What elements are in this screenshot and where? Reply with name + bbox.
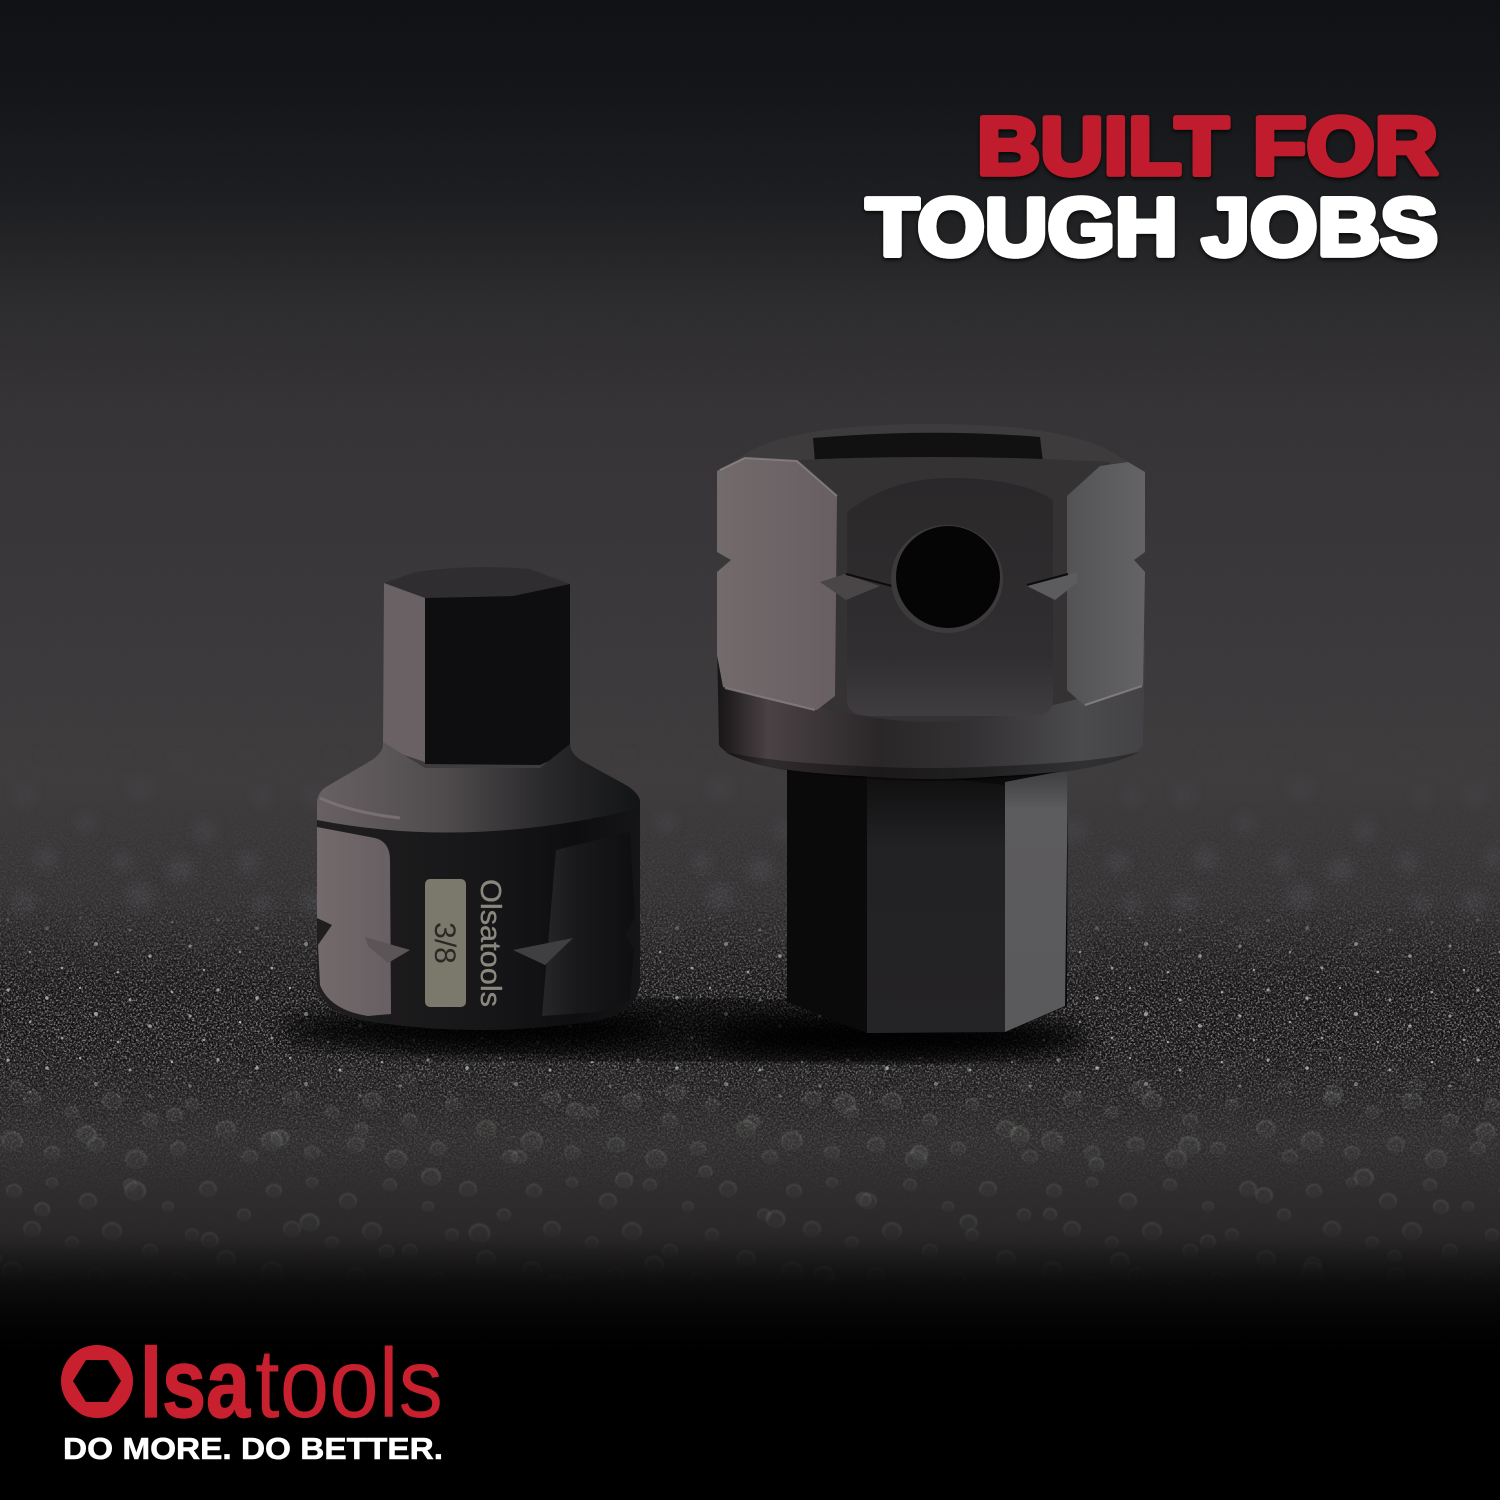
sparkling glints on the surface [6,916,1500,1098]
shadow under sockets [280,1004,1090,1060]
large socket: band lower shadow [725,752,1138,781]
large socket: collar band [717,640,1145,779]
large socket: left light face [717,458,837,710]
large socket: centre dark face [847,478,1053,716]
small socket: size label plate [425,879,466,1007]
logo: light letters: tools [255,1328,443,1438]
large socket: right light face [1067,462,1145,706]
small socket: engraved brand: Olsatools [474,879,506,1007]
small socket, 3/8 [317,567,640,1030]
large socket: face highlights [720,458,1142,710]
fine surface grain band [0,855,1500,1178]
small socket: left light face [317,827,391,1016]
logo: hex O mark: O [62,1327,133,1438]
small socket: hex shank top [384,567,570,598]
small socket: hex shank light face [383,583,425,762]
large socket: hex shank [787,760,1068,1033]
logo [61,1327,443,1466]
large socket: body behind the faces [760,457,1110,722]
large socket: pin hole [891,525,1003,633]
bokeh droplets on the foreground [1,1064,1500,1267]
small socket: collar highlight [320,798,400,818]
small socket: right notch [513,938,573,965]
large socket: left notch [820,574,880,600]
large socket: top rim [717,424,1145,520]
small socket: left notch [365,937,410,963]
headline [866,101,1438,273]
small socket: flared collar [317,742,640,840]
large socket: square drive recess [813,433,1043,462]
bottom fade to black [0,1240,1500,1370]
headline line two: TOUGH JOBS [866,182,1438,273]
large socket: right notch [1027,572,1078,600]
logo: bold letters: lsa [140,1328,251,1438]
large socket [717,424,1145,1033]
headline line one: BUILT FOR [977,101,1438,192]
large socket: notch shadow lines [846,574,1068,586]
out-of-focus haze behind the sockets [16,852,1494,910]
logo: tagline: DO MORE. DO BETTER. [63,1431,443,1466]
small socket: hex shank dark face [425,584,570,765]
small socket: size marking: 3/8 [428,922,461,964]
small socket: base block [317,808,640,1030]
small socket: right dark face [542,832,635,1016]
